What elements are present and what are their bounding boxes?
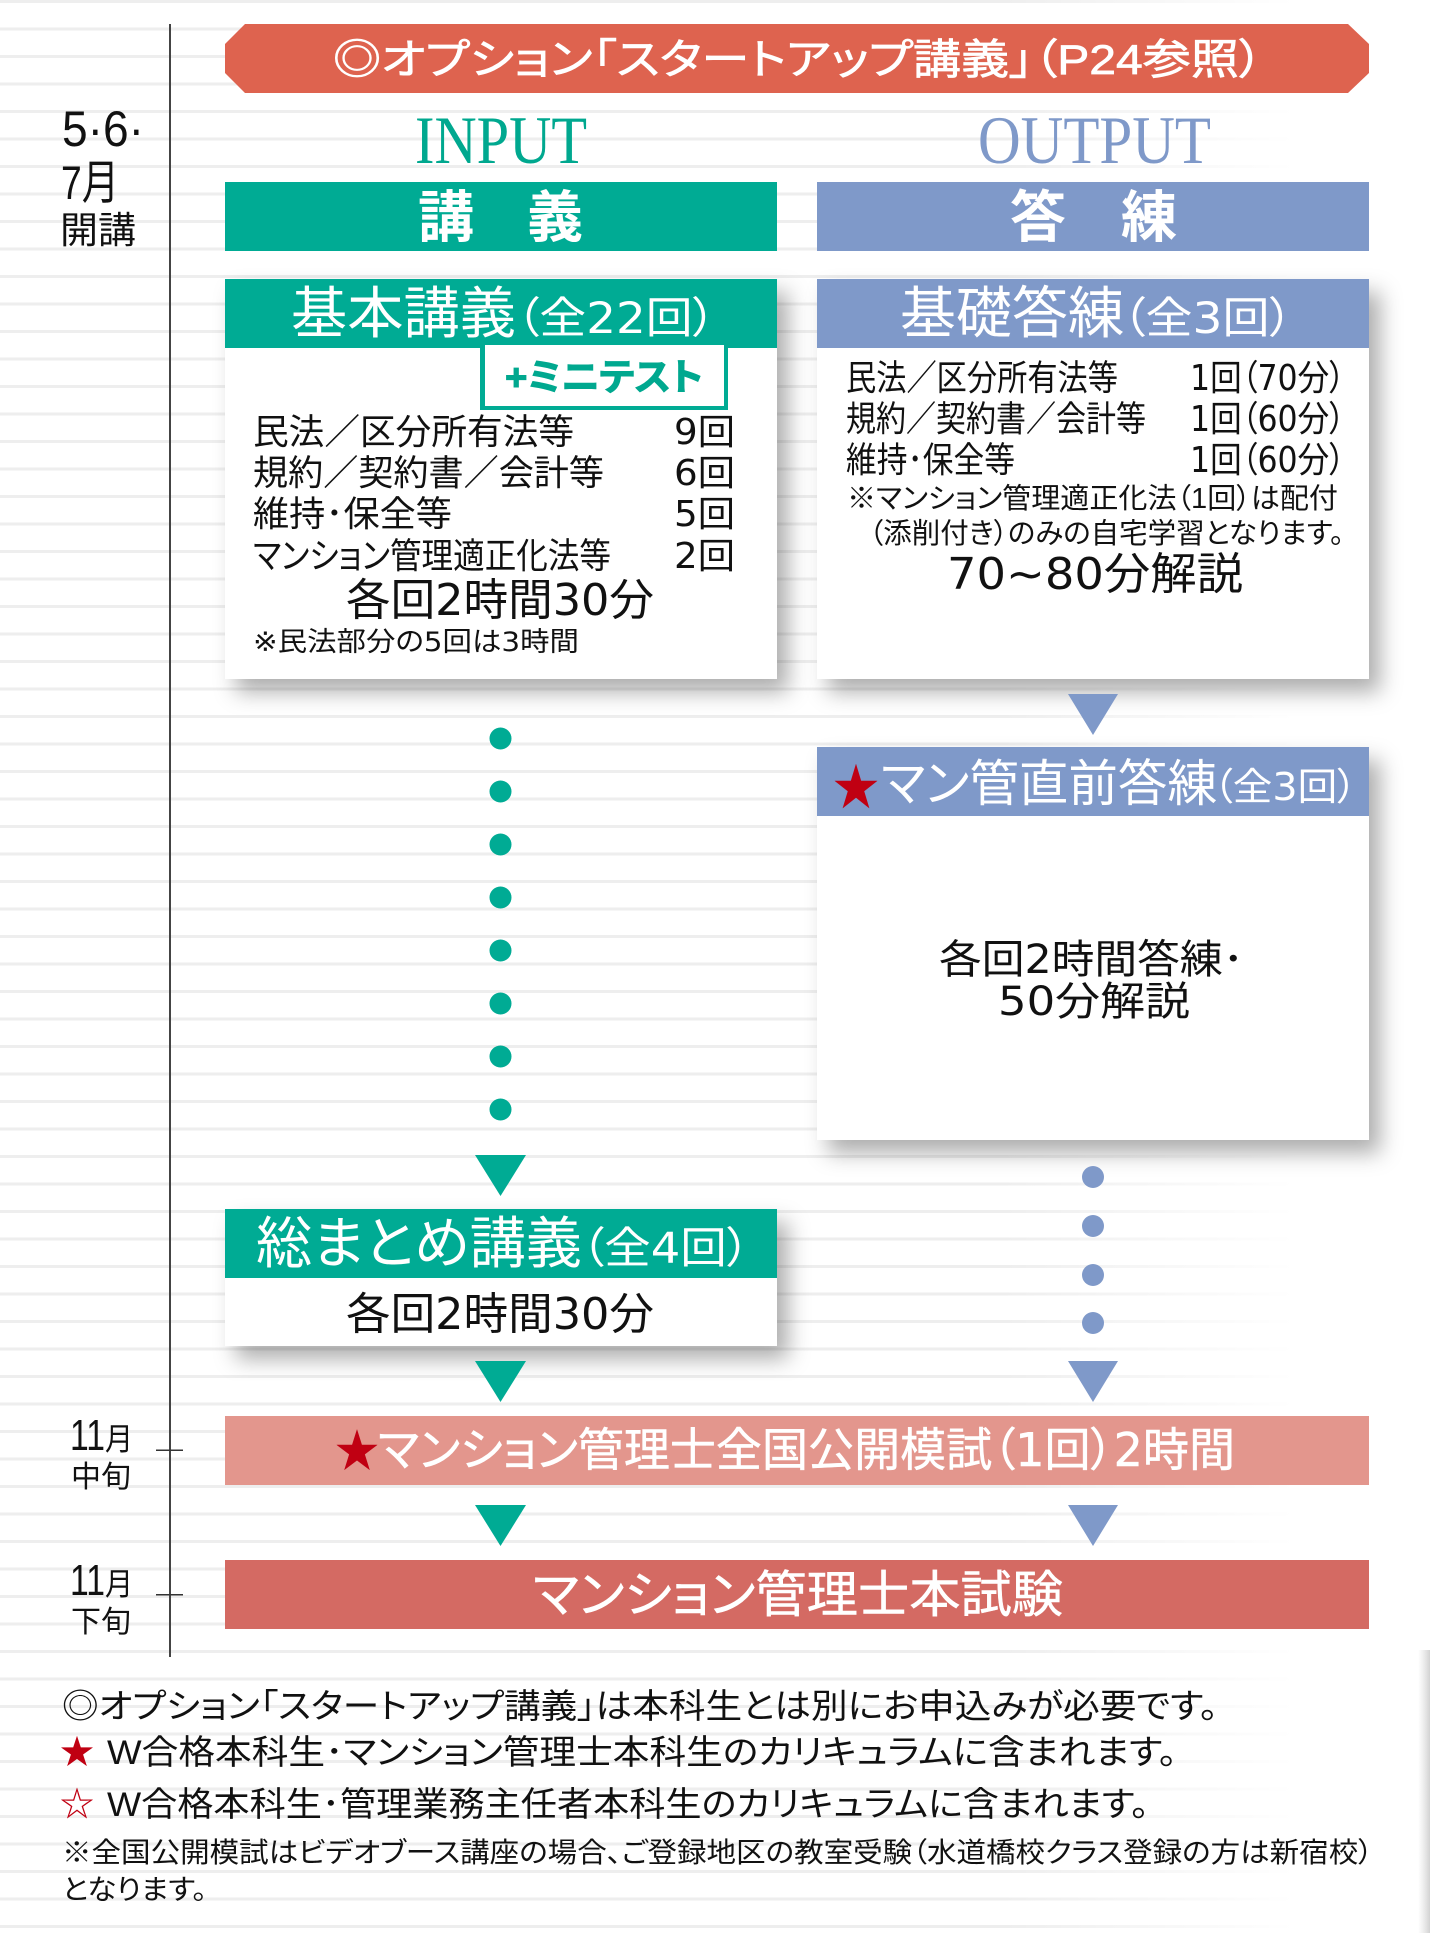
practice explanation: 70~80分解説: [947, 549, 1243, 600]
basic lectures title: [291, 282, 716, 345]
late November label: [70, 1556, 133, 1639]
lecture list: [253, 412, 735, 577]
mid November label: 月: [105, 1422, 133, 1457]
lecture list: 維持･保全等: [253, 494, 452, 534]
late November label: 11: [70, 1556, 105, 1605]
dotted connector: practice: [1082, 1166, 1104, 1334]
start date label: 5·6·: [62, 101, 144, 157]
pre-exam practice title: ★: [833, 760, 879, 816]
practice list: 1回（60分）: [1190, 399, 1345, 440]
bar: national mock exam: ★: [335, 1425, 379, 1477]
basic practice title: 基礎答練: [900, 282, 1124, 345]
practice note: [847, 483, 1344, 550]
mid November label: 11: [70, 1411, 105, 1460]
practice list: [846, 358, 1345, 481]
pre-exam practice title: [833, 756, 1357, 816]
OUTPUT heading: OUTPUT: [978, 102, 1211, 178]
lecture duration: 各回2時間30分: [346, 575, 654, 626]
practice list: 1回（70分）: [1190, 358, 1345, 399]
footnotes: ※全国公開模試はビデオブース講座の場合、ご登録地区の教室受験（水道橋校クラス登録の方は新宿校）: [62, 1837, 1373, 1868]
bar: national mock exam: [225, 1416, 1369, 1485]
pre-exam practice title: （全3回）: [1213, 765, 1357, 809]
practice list: 維持･保全等: [846, 440, 1015, 480]
practice list: 民法／区分所有法等: [846, 358, 1118, 398]
lecture list: 規約／契約書／会計等: [253, 453, 604, 493]
panel: basic lectures: [225, 279, 777, 679]
lecture list: 5回: [674, 494, 735, 535]
footnotes: ☆: [60, 1786, 94, 1824]
footnotes: ★: [60, 1734, 94, 1772]
late November label: 月: [105, 1567, 133, 1602]
basic practice title: [900, 282, 1293, 345]
timeline axis: [156, 24, 183, 1657]
panel: pre-exam practice: [817, 747, 1369, 1140]
option banner: [225, 24, 1369, 93]
start date label: [60, 101, 144, 251]
lecture list: 2回: [674, 536, 735, 577]
summary lectures title: [256, 1212, 750, 1275]
mini test tag: +ミニテスト: [505, 357, 703, 398]
basic practice title: （全3回）: [1122, 294, 1293, 344]
footnotes: ◎オプション「スタートアップ講義」は本科生とは別にお申込みが必要です。: [62, 1688, 1218, 1726]
lecture list: マンション管理適正化法等: [253, 536, 611, 576]
pre-exam practice detail: 50分解説: [998, 979, 1190, 1025]
footnotes: となります。: [62, 1874, 207, 1905]
option banner: ◎オプション「スタートアップ講義」（P24参照）: [333, 36, 1263, 83]
late November label: 下旬: [71, 1606, 131, 1639]
bar: final exam: マンション管理士本試験: [533, 1567, 1063, 1623]
arrow: summary to mock exam: [475, 1361, 526, 1402]
lecture column header: 講: [418, 186, 474, 249]
practice column header: [817, 182, 1369, 251]
footnotes: [60, 1688, 1373, 1905]
bar: final exam: [225, 1560, 1369, 1629]
practice list: 規約／契約書／会計等: [846, 399, 1146, 439]
arrow: practice to mock exam: [1068, 1361, 1118, 1402]
bar: national mock exam: マンション管理士全国公開模試（1回）2時間: [378, 1423, 1235, 1477]
summary lectures title: 総まとめ講義: [256, 1212, 582, 1275]
practice list: 1回（60分）: [1190, 440, 1345, 481]
start date label: 7月: [61, 156, 119, 209]
arrow: lectures down: [475, 1155, 526, 1196]
panel: final summary lectures: [225, 1209, 777, 1346]
pre-exam practice detail: 各回2時間答練･: [939, 937, 1244, 983]
practice note: ※マンション管理適正化法（1回）は配付: [847, 483, 1338, 515]
practice column header: 練: [1121, 186, 1177, 249]
lecture list: 6回: [674, 453, 735, 494]
footnotes: W合格本科生･管理業務主任者本科生のカリキュラムに含まれます。: [107, 1786, 1149, 1824]
panel: basic practice: [817, 279, 1369, 679]
dotted connector: lectures: [490, 728, 512, 1120]
lecture list: 9回: [674, 412, 735, 453]
arrow: practice down: [1068, 694, 1118, 735]
start date label: 開講: [60, 210, 136, 251]
footnotes: W合格本科生･マンション管理士本科生のカリキュラムに含まれます。: [107, 1734, 1177, 1772]
INPUT heading: INPUT: [415, 102, 587, 178]
mini test tag: [480, 344, 728, 410]
arrow: mock exam practice side: [1068, 1505, 1118, 1546]
lecture list: 民法／区分所有法等: [253, 412, 574, 452]
arrow: mock exam lecture side: [475, 1505, 526, 1546]
lecture column header: 義: [527, 186, 583, 249]
basic lectures title: 基本講義: [291, 282, 516, 345]
mid November label: 中旬: [71, 1461, 131, 1494]
pre-exam practice title: マン管直前答練: [881, 756, 1217, 812]
practice note: （添削付き）のみの自宅学習となります。: [869, 518, 1344, 550]
practice column header: 答: [1010, 186, 1066, 249]
lecture column header: [225, 182, 777, 251]
basic lectures title: （全22回）: [516, 294, 716, 344]
pre-exam practice detail: [939, 937, 1244, 1025]
mid November label: [70, 1411, 133, 1494]
summary duration: 各回2時間30分: [346, 1289, 654, 1340]
lecture note: ※民法部分の5回は3時間: [253, 627, 579, 658]
summary lectures title: （全4回）: [581, 1224, 750, 1274]
